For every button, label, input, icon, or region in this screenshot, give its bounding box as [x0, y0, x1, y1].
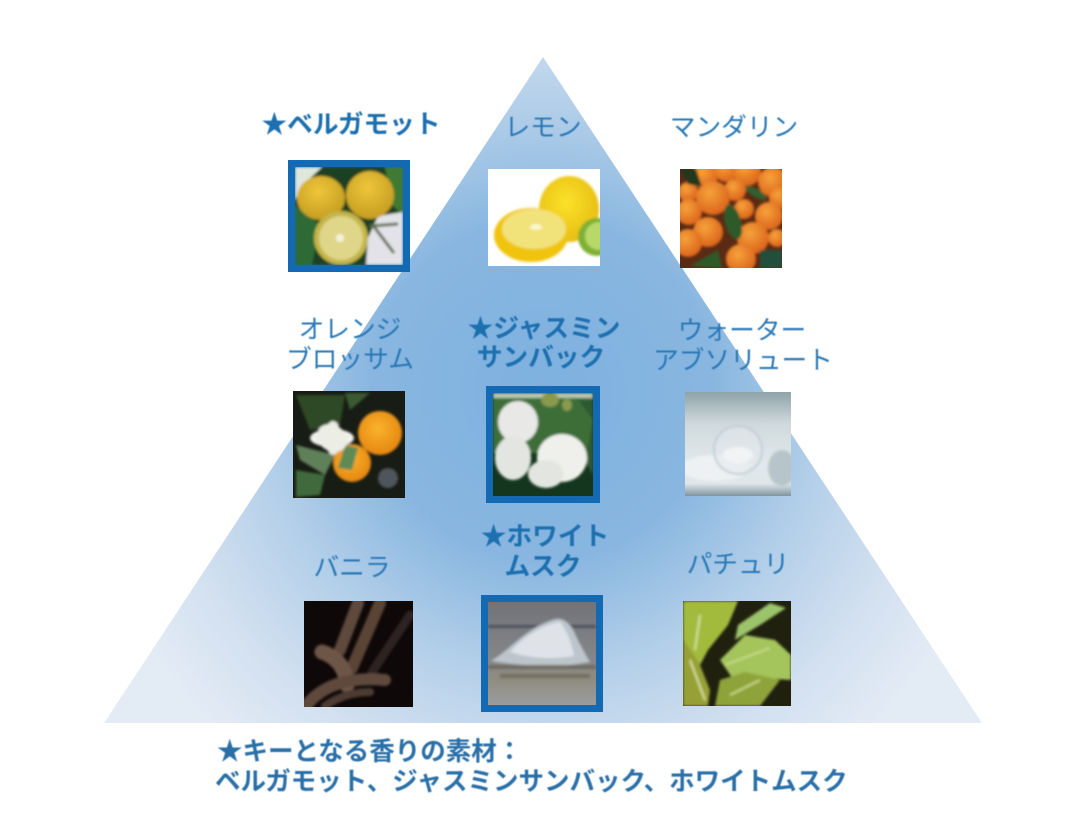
label: mandarin: マンダリン	[670, 113, 798, 142]
key ingredients note: ★キーとなる香りの素材：	[217, 738, 522, 766]
item: bergamot	[261, 110, 441, 272]
label: orange blossom: ブロッサム	[286, 345, 414, 374]
label: lemon: レモン	[504, 114, 582, 142]
fragrance pyramid infographic	[104, 57, 982, 794]
label: white musk: ムスク	[504, 552, 582, 581]
item: orange blossom	[286, 316, 414, 498]
item: water absolute	[653, 317, 833, 496]
photo: patchouli leaves	[683, 601, 791, 706]
item: vanilla	[304, 554, 413, 707]
label: water absolute: ウォーター	[678, 317, 806, 345]
photo: mandarin oranges	[680, 169, 782, 268]
item: white musk	[481, 523, 609, 712]
label: patchouli: パチュリ	[687, 551, 789, 579]
photo: lemon	[488, 169, 600, 266]
photo: vanilla pods	[304, 601, 413, 707]
photo: bergamot with blue frame	[288, 160, 410, 272]
label: bergamot: ★ベルガモット	[261, 110, 441, 139]
pyramid background triangle	[104, 57, 982, 723]
label: orange blossom: オレンジ	[299, 316, 401, 344]
label: white musk: ★ホワイト	[481, 523, 609, 551]
item: lemon	[488, 116, 600, 266]
photo: white musk with blue frame	[481, 595, 603, 712]
photo: orange blossom	[293, 391, 405, 498]
label: water absolute: アブソリュート	[653, 346, 833, 375]
photo: jasmine sambac with blue frame	[486, 386, 600, 503]
item: jasmine sambac	[468, 315, 620, 503]
photo: water absolute	[681, 392, 796, 496]
key ingredients note: ベルガモット、ジャスミンサンバック、ホワイトムスク	[215, 768, 848, 796]
item: patchouli	[683, 551, 791, 706]
label: jasmine sambac: サンバック	[477, 343, 605, 372]
label: jasmine sambac: ★ジャスミン	[468, 315, 620, 343]
item: mandarin	[670, 113, 798, 274]
label: vanilla: バニラ	[313, 554, 391, 582]
